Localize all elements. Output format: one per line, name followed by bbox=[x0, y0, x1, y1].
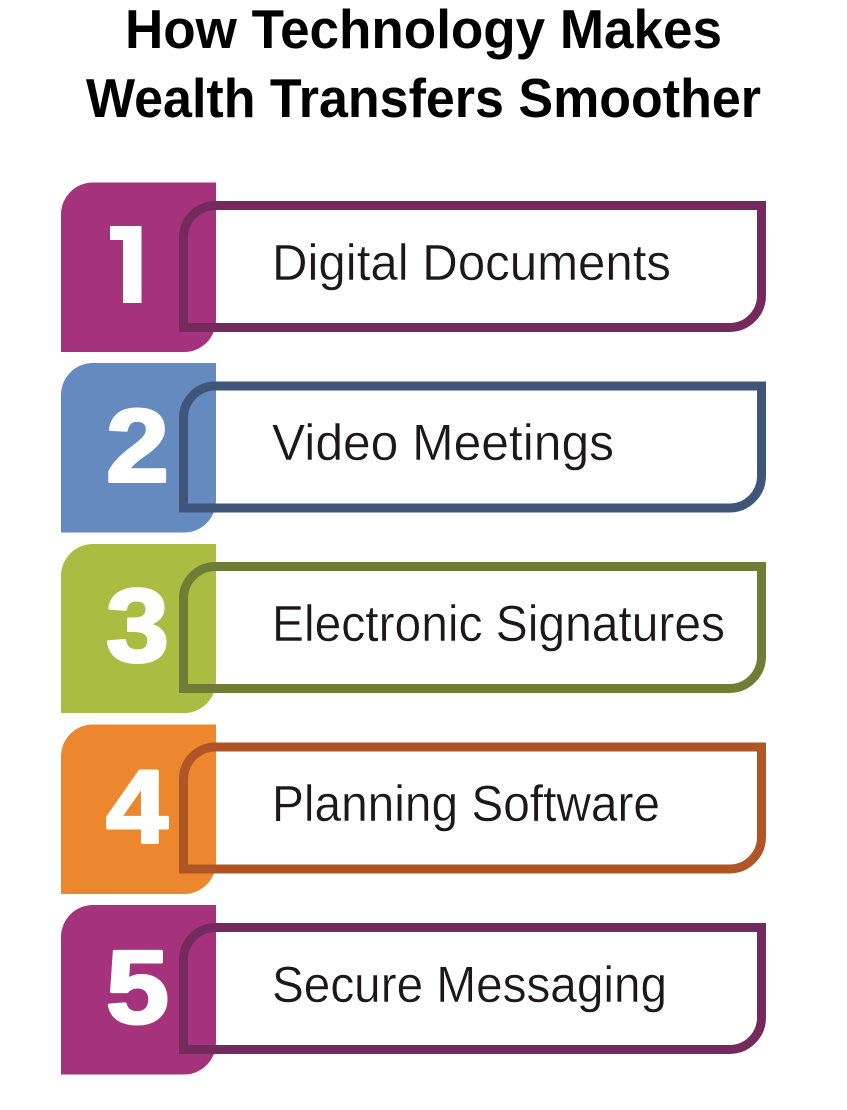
number block 1 bbox=[61, 182, 216, 352]
item 3: Electronic Signatures bbox=[61, 544, 762, 713]
item 4: Planning Software bbox=[61, 724, 762, 894]
label 2: Video Meetings bbox=[272, 414, 614, 471]
item 5: Secure Messaging bbox=[61, 905, 762, 1074]
number 3: 3 bbox=[106, 568, 169, 684]
outlined label box 3 bbox=[184, 566, 762, 688]
label 5: Secure Messaging bbox=[272, 956, 667, 1013]
outlined label box 5 bbox=[184, 928, 762, 1050]
outlined label box 4 bbox=[184, 747, 762, 869]
number block 5 bbox=[61, 905, 216, 1074]
number 5: 5 bbox=[106, 930, 169, 1046]
number 2: 2 bbox=[106, 388, 169, 504]
number 4: 4 bbox=[106, 750, 168, 866]
number 1: 1 bbox=[98, 205, 154, 326]
item 1: Digital Documents bbox=[61, 182, 762, 352]
number block 2 bbox=[61, 363, 216, 532]
label 3: Electronic Signatures bbox=[272, 595, 725, 652]
number block 3 bbox=[61, 544, 216, 713]
label 4: Planning Software bbox=[272, 775, 660, 832]
item 2: Video Meetings bbox=[61, 363, 762, 532]
outlined label box 1 bbox=[184, 206, 762, 328]
label 1: Digital Documents bbox=[272, 234, 671, 291]
title bbox=[86, 0, 761, 129]
outlined label box 2 bbox=[184, 386, 762, 508]
title: Wealth Transfers Smoother bbox=[86, 67, 761, 129]
number block 4 bbox=[61, 724, 216, 894]
